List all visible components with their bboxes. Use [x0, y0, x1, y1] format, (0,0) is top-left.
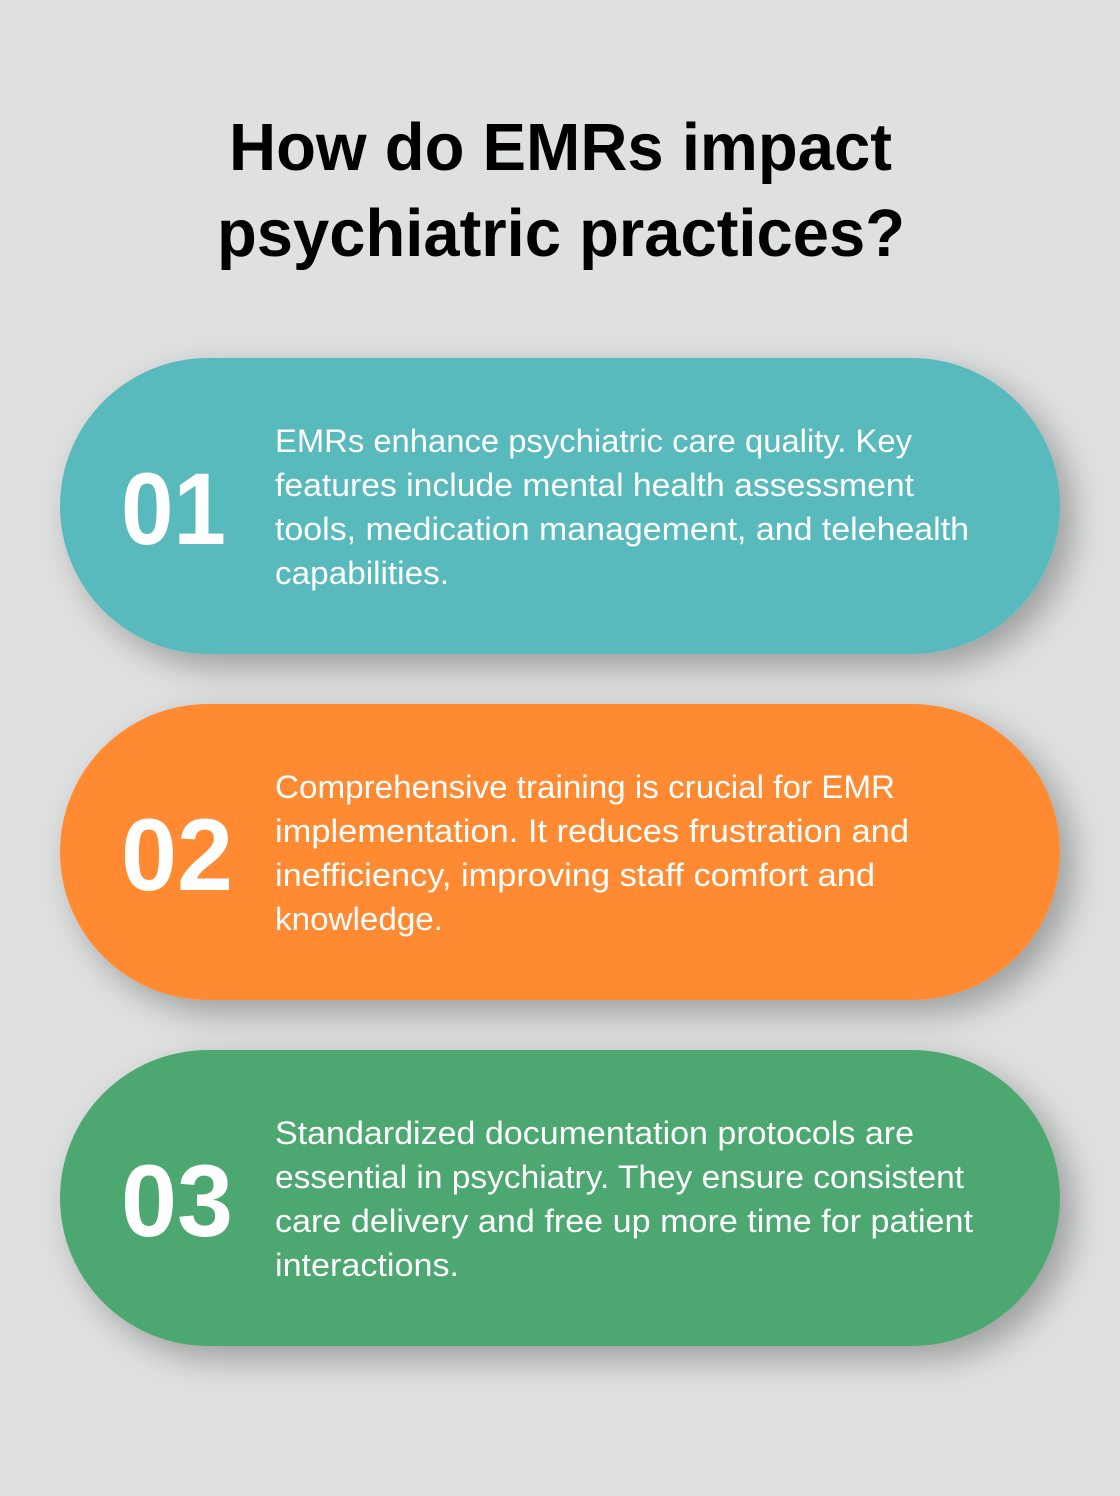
text block 02: knowledge.	[275, 901, 443, 937]
text block 03: care delivery and free up more time for patient	[275, 1203, 973, 1239]
title: How do EMRs impact	[229, 110, 892, 185]
pill background 03	[60, 1050, 1060, 1346]
text block 02: inefficiency, improving staff comfort and	[275, 857, 875, 893]
text block 02: Comprehensive training is crucial for EMR	[275, 769, 895, 805]
title	[217, 110, 905, 271]
number 02: 02	[121, 798, 233, 912]
panel: step 02	[60, 704, 1060, 1000]
text block 01: EMRs enhance psychiatric care quality. Key	[275, 423, 912, 459]
text block 02: implementation. It reduces frustration and	[275, 813, 909, 849]
panel: step 01	[60, 358, 1060, 654]
text block 03: Standardized documentation protocols are	[275, 1115, 914, 1151]
text block 03: essential in psychiatry. They ensure consistent	[275, 1159, 964, 1195]
text block 03	[275, 1115, 973, 1283]
pill background 02	[60, 704, 1060, 1000]
text block 02	[275, 769, 909, 937]
text block 01	[275, 423, 969, 591]
text block 01: tools, medication management, and telehealth	[275, 511, 969, 547]
text block 01: features include mental health assessment	[275, 467, 914, 503]
panel: step 03	[60, 1050, 1060, 1346]
number 03: 03	[121, 1144, 233, 1258]
pill background 01	[60, 358, 1060, 654]
text block 03: interactions.	[275, 1247, 459, 1283]
title: psychiatric practices?	[217, 196, 905, 271]
number 01: 01	[121, 452, 226, 566]
text block 01: capabilities.	[275, 555, 449, 591]
